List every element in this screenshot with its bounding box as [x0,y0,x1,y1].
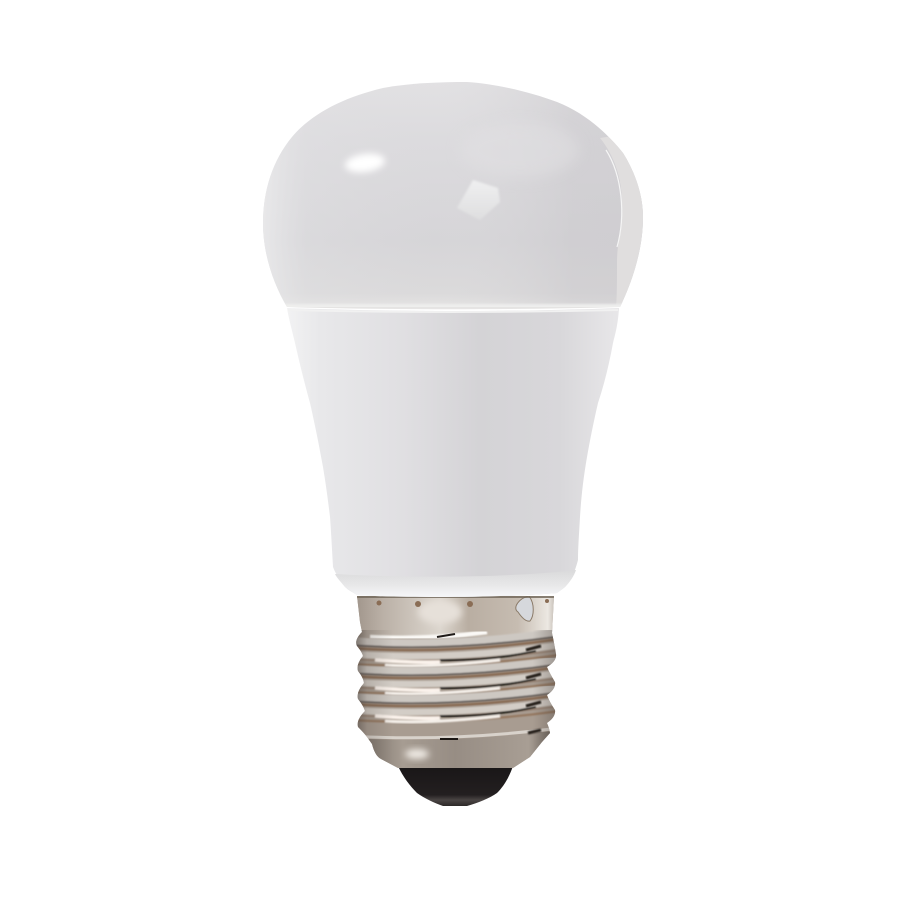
bottom glow [286,304,621,307]
glue drop [516,596,533,621]
highlight: window glare left [344,151,386,175]
thread repeats [350,632,560,666]
soft upper right glow [460,122,580,178]
side shading [356,630,556,754]
collar [357,596,554,637]
white housing [287,308,619,597]
lower rim band [335,570,576,597]
right rim crescent [600,137,643,304]
solder dimples [376,599,549,607]
highlight: window glare right [457,180,500,220]
housing rim highlight [288,310,618,312]
screw base [356,596,556,768]
frosted dome [260,80,650,310]
metal threads [356,596,556,768]
lower cup [368,731,550,768]
first bright thread [370,632,487,638]
illustration: LED light bulb [263,82,643,806]
black insulator tip [398,766,513,806]
right-side dark reflections [526,646,541,733]
